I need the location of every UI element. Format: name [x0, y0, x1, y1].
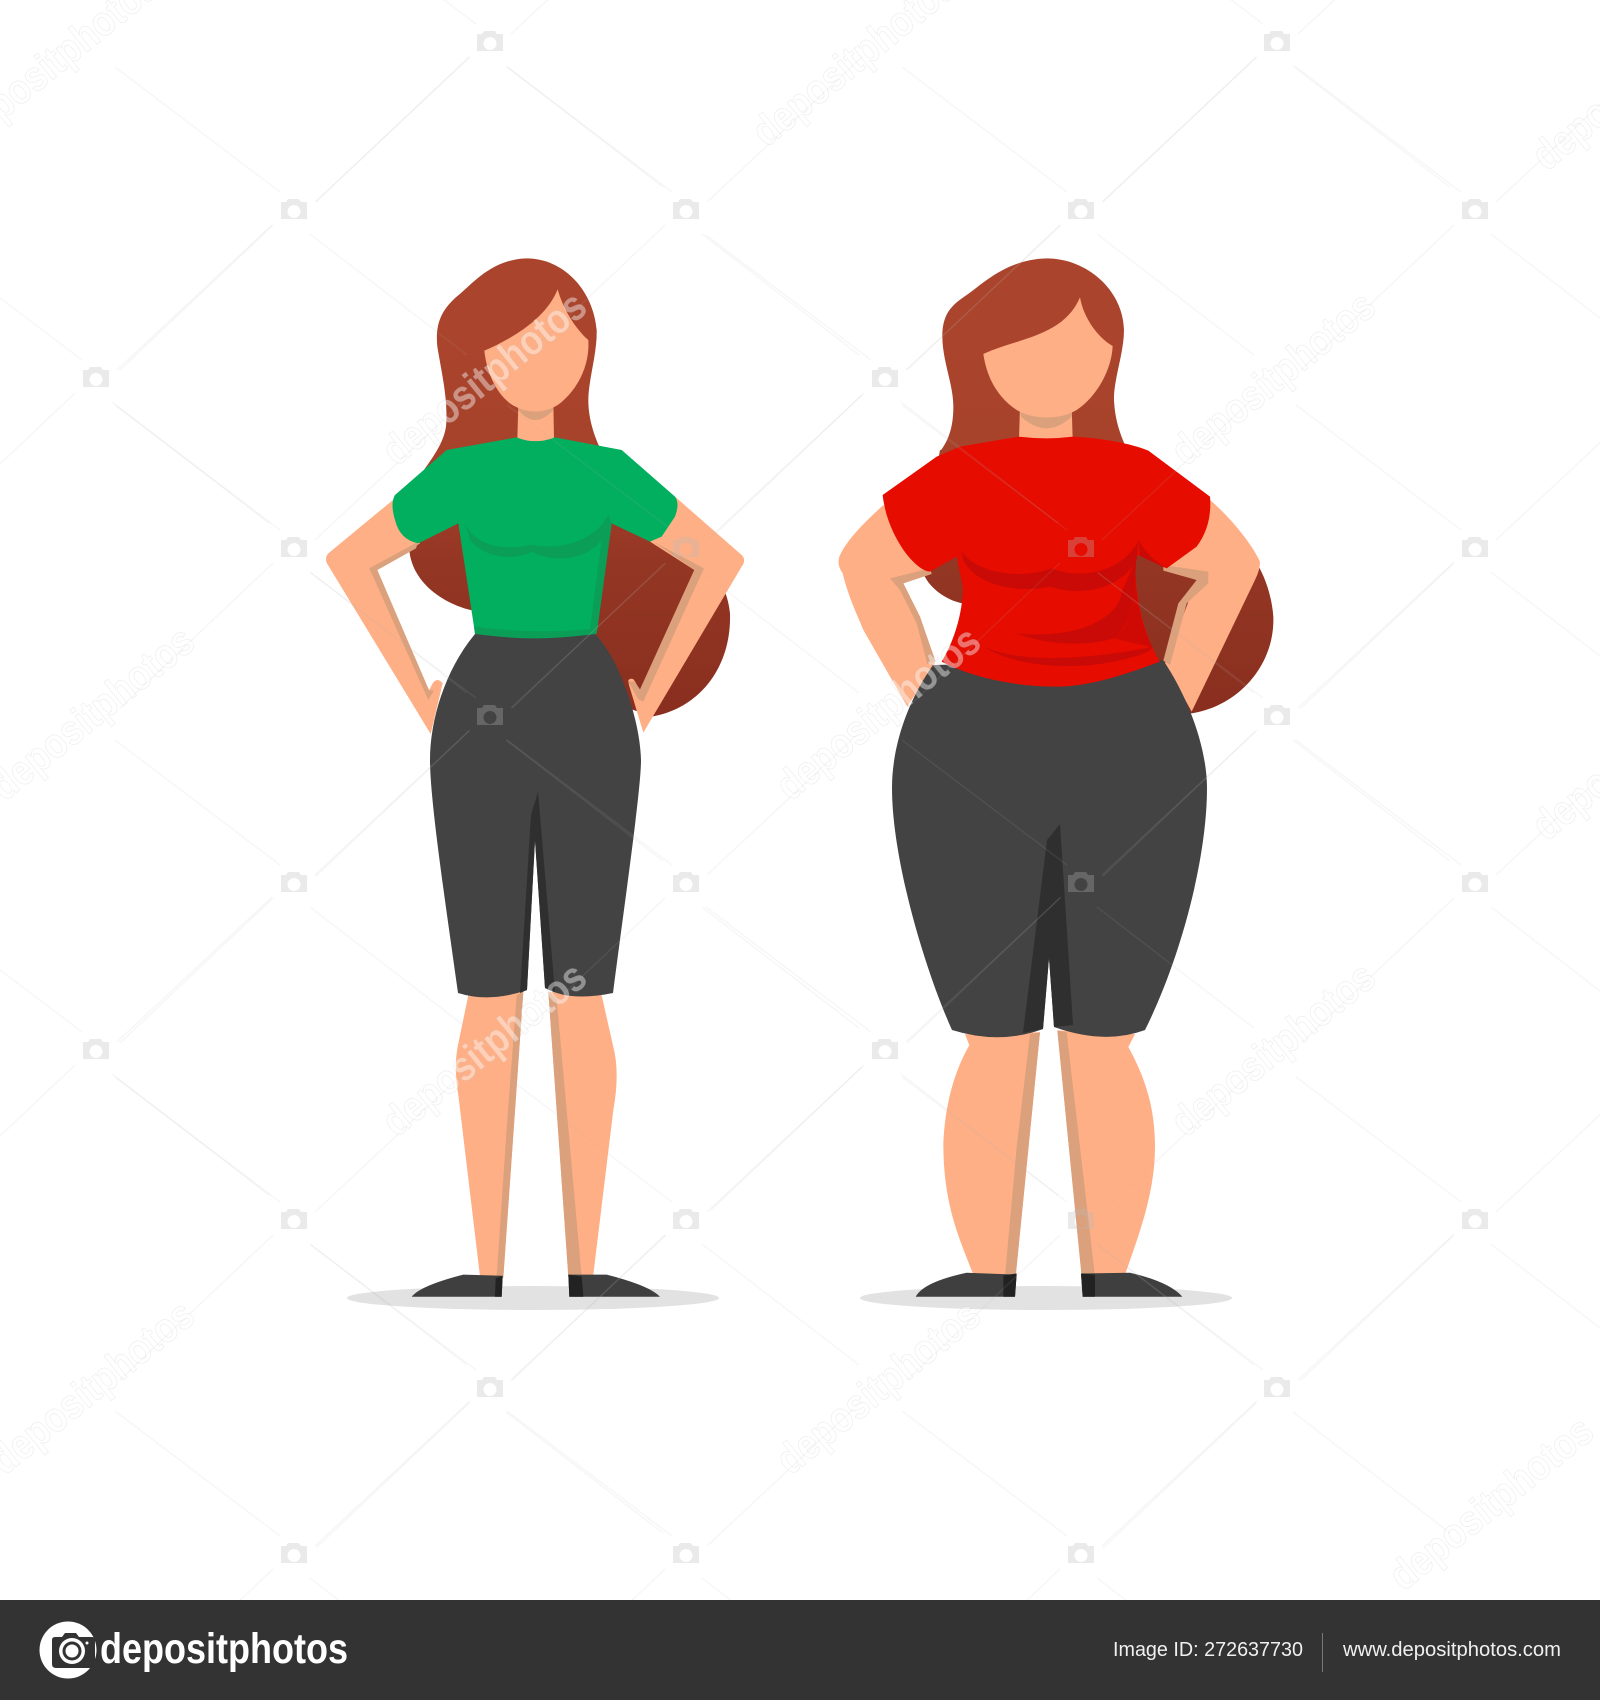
skirt: overweight woman: [892, 660, 1207, 1037]
watermark layer: depositphotos: [767, 1290, 989, 1483]
green shirt: [392, 437, 677, 638]
arms: slim woman: [326, 497, 744, 734]
legs and shoes: overweight woman: [916, 1030, 1182, 1297]
watermark layer: depositphotos: [373, 952, 595, 1145]
watermark layer: depositphotos: [767, 616, 989, 809]
ground shadow: slim woman: [347, 1286, 719, 1310]
skirt: slim woman: [430, 634, 641, 997]
hair and head: overweight woman: [923, 258, 1273, 713]
red shirt: [883, 437, 1210, 687]
figure: slim woman: [326, 258, 744, 1310]
watermark layer: depositphotos: [1162, 281, 1384, 474]
logo wordmark: depositphotos: [100, 1625, 348, 1673]
website url: www.depositphotos.com: [1342, 1639, 1561, 1661]
hair and head: slim woman: [409, 258, 730, 717]
arms: overweight woman: [839, 500, 1260, 712]
watermark layer: depositphotos: [373, 281, 595, 474]
figure: overweight woman: [839, 258, 1273, 1310]
legs and shoes: slim woman: [412, 992, 660, 1297]
image id: Image ID: 272637730: [1113, 1639, 1303, 1661]
icon: depositphotos camera logo: [40, 1622, 96, 1678]
ground shadow: overweight woman: [860, 1286, 1232, 1310]
footer bar: [0, 1600, 1600, 1700]
watermark layer: depositphotos: [1162, 952, 1384, 1145]
